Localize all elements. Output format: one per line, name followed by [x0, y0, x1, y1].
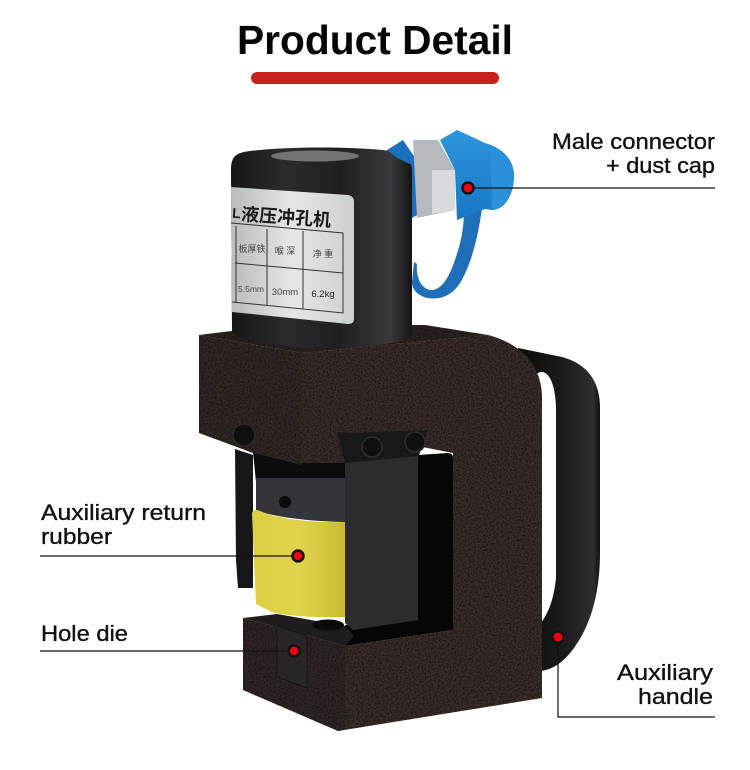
label table text: 30mm [272, 287, 298, 298]
label table text: 5.5mm [238, 284, 264, 294]
label table text: 6.2kg [311, 289, 335, 300]
body: lower block top surface [243, 614, 354, 646]
label table text: 净 重 [313, 248, 333, 259]
callout: auxiliary handle: handle [638, 684, 713, 709]
title underline bar [251, 72, 499, 84]
callout: auxiliary return rubber: Auxiliary return [41, 500, 206, 525]
hydraulic cylinder [231, 148, 412, 348]
icon: socket screw [405, 432, 425, 452]
male connector with blue cap [387, 130, 514, 220]
product photo: hydraulic hole punch [199, 130, 600, 731]
callout: auxiliary handle [552, 632, 715, 717]
callout: male connector + dust cap [462, 129, 716, 194]
body: top surface [199, 325, 488, 353]
icon: collar screw hole [279, 496, 291, 508]
callout: male connector + dust cap: Male connector [552, 129, 716, 154]
ram threads [253, 452, 346, 482]
body: left block face [199, 335, 302, 465]
body: lower block left face [243, 618, 345, 731]
label table text: 喉 深 [275, 245, 295, 256]
label table text [238, 243, 335, 300]
callout: hole die [40, 621, 300, 656]
icon: left socket screw [233, 424, 255, 446]
hole die insert [277, 626, 307, 688]
callout: auxiliary handle: Auxiliary [617, 660, 714, 685]
upper guide tab [337, 430, 428, 463]
icon: socket screw [362, 437, 382, 457]
callout: auxiliary return rubber [40, 500, 304, 562]
callout: male connector + dust cap: + dust cap [606, 153, 715, 178]
title: Product Detail [237, 17, 513, 63]
label heading: L [232, 205, 242, 221]
label heading: 液压冲孔机 [240, 204, 332, 231]
callout: auxiliary return rubber: rubber [41, 524, 113, 549]
window recess [345, 453, 453, 646]
callout: hole die: Hole die [41, 621, 128, 646]
body: rear plate behind ram [235, 449, 253, 588]
label table [231, 223, 343, 313]
front guide plate [345, 456, 418, 630]
icon: auxiliary handle [518, 348, 600, 671]
body: main frame right face [302, 335, 542, 731]
yellow return rubber [252, 510, 346, 617]
icon: blue dust cap strap [412, 208, 482, 298]
icon: lower block bolt hole [312, 620, 344, 630]
cylinder label [231, 187, 354, 324]
label table text: 板厚铁 [238, 243, 266, 254]
ram collar [256, 478, 348, 522]
